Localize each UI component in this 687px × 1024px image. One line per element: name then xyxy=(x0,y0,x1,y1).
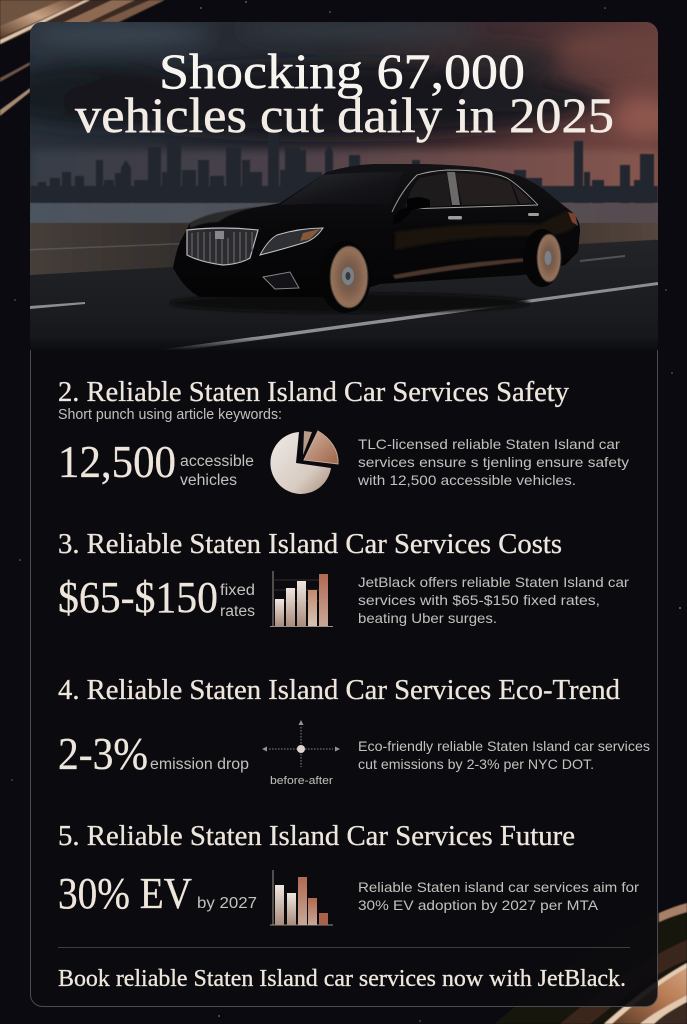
section 2 subheading: Short punch using article keywords: xyxy=(58,406,282,423)
before-after label: before-after xyxy=(270,775,333,787)
section 2 heading: 2. Reliable Staten Island Car Services Safety xyxy=(58,377,569,408)
section 5: future xyxy=(58,821,639,925)
section 4 body text: cut emissions by 2-3% per NYC DOT. xyxy=(358,756,594,772)
car body xyxy=(173,164,580,297)
windshield xyxy=(280,172,403,205)
section 3 body text: beating Uber surges. xyxy=(358,610,497,626)
stat label: emission drop: emission drop xyxy=(150,756,249,773)
tail light xyxy=(568,212,578,226)
call to action: Book reliable Staten Island car services now with JetBlack. xyxy=(58,966,626,992)
water xyxy=(30,203,658,224)
section 2 body text: with 12,500 accessible vehicles. xyxy=(357,472,576,488)
grille slats xyxy=(192,232,252,264)
section 5 body text: 30% EV adoption by 2027 per MTA xyxy=(358,897,599,913)
body reflection: door glow xyxy=(395,210,576,250)
section 3 body text xyxy=(358,574,629,626)
hero photo xyxy=(0,22,675,350)
title: Shocking 67,000 xyxy=(159,43,525,99)
section 2 body text xyxy=(357,436,629,488)
bar chart icon: future xyxy=(270,870,333,925)
window chrome xyxy=(392,170,538,212)
stat: $65-$150: $65-$150 xyxy=(58,573,218,622)
door handles xyxy=(448,216,462,220)
stat label: accessible vehicles xyxy=(180,453,254,489)
side window: rear xyxy=(512,183,533,204)
stat label: accessible vehicles: vehicles xyxy=(180,472,237,489)
section 5 body text: Reliable Staten island car services aim for xyxy=(358,879,639,895)
bar chart icon: costs xyxy=(270,571,333,627)
stat label: fixed rates: fixed xyxy=(220,582,255,599)
section 4 heading: 4. Reliable Staten Island Car Services Eco-Trend xyxy=(58,675,620,706)
chrome pillar xyxy=(447,172,460,205)
pie chart icon xyxy=(270,431,338,494)
section 4: eco-trend xyxy=(58,675,650,787)
body reflection: sill xyxy=(393,258,530,279)
car shadow xyxy=(170,293,530,313)
stat: 30% EV: 30% EV xyxy=(58,869,192,918)
hood highlight xyxy=(190,206,258,228)
before-after dot diagram xyxy=(262,720,340,787)
grille xyxy=(187,228,258,265)
side window: front xyxy=(405,173,451,207)
section 4 body text xyxy=(358,738,650,772)
stat: 12,500: 12,500 xyxy=(58,436,176,487)
sky xyxy=(30,22,658,212)
storm clouds xyxy=(0,22,675,138)
grille badge xyxy=(215,231,224,239)
decorative copper streaks: bottom right xyxy=(494,903,687,1024)
rear wheel xyxy=(523,229,561,287)
section 2 body text: services ensure s tjenling ensure safety xyxy=(358,454,629,470)
section 3: costs xyxy=(58,529,629,627)
photo fade to panel xyxy=(158,339,262,350)
section 3 heading: 3. Reliable Staten Island Car Services Costs xyxy=(58,529,562,560)
stat label: fixed rates: rates xyxy=(220,603,255,620)
horizon glow xyxy=(30,146,658,186)
road markings xyxy=(30,243,658,350)
roadside barrier xyxy=(30,223,658,276)
limousine xyxy=(170,164,580,313)
title: vehicles cut daily in 2025 xyxy=(75,87,614,143)
section 2 body text: TLC-licensed reliable Staten Island car xyxy=(358,436,620,452)
stat label: by 2027: by 2027 xyxy=(197,895,257,912)
stat label: fixed rates xyxy=(220,582,255,620)
title xyxy=(75,43,614,143)
fog lamp xyxy=(263,272,299,289)
section 3 body text: JetBlack offers reliable Staten Island car xyxy=(358,574,629,590)
section 3 body text: services with $65-$150 fixed rates, xyxy=(358,592,600,608)
road xyxy=(30,240,658,350)
mirror xyxy=(393,197,430,224)
section 5 heading: 5. Reliable Staten Island Car Services Future xyxy=(58,821,575,852)
stat: 2-3%: 2-3% xyxy=(58,728,148,779)
section 5 body text xyxy=(358,879,639,913)
stat label: accessible vehicles: accessible xyxy=(180,453,254,470)
side window: middle xyxy=(455,173,518,205)
section 4 body text: Eco-friendly reliable Staten Island car services xyxy=(358,738,650,754)
section 2: safety xyxy=(58,377,629,494)
front wheel xyxy=(330,246,370,313)
decorative copper streaks: top left xyxy=(0,0,165,116)
headlight xyxy=(260,228,323,255)
skyline xyxy=(30,133,658,208)
